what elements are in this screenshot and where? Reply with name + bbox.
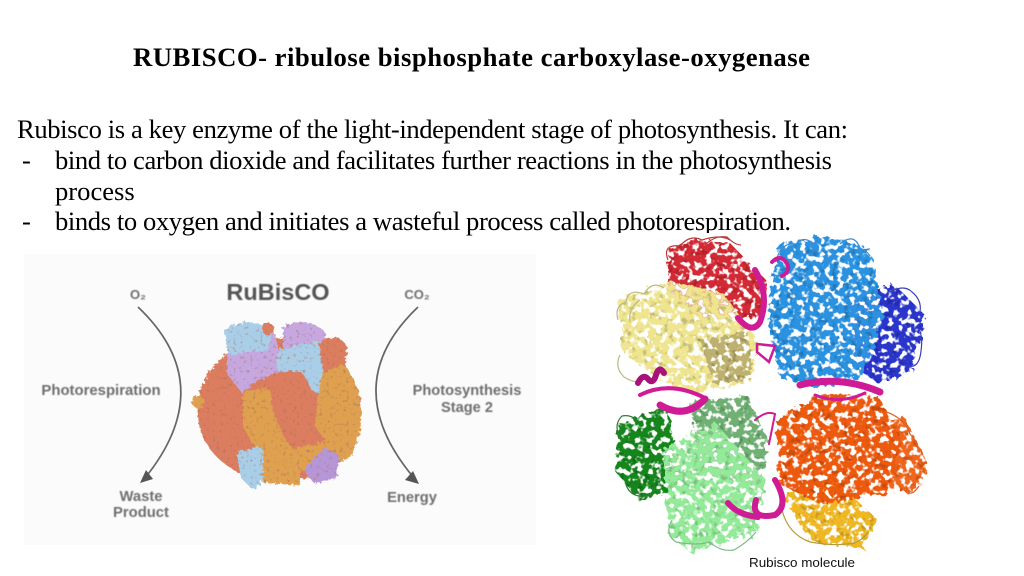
protein ribbon: light blue subunit (768, 236, 884, 388)
icon: RuBisCO protein globule (192, 323, 361, 484)
label: waste product: Waste (119, 489, 163, 505)
protein ribbon: magenta links (638, 258, 880, 517)
panel: Rubisco molecule structure (610, 233, 928, 570)
protein ribbon: yellow tan inner (700, 332, 752, 386)
caption: Rubisco molecule: Rubisco molecule (749, 556, 855, 570)
panel: RuBisCO diagram (24, 254, 536, 545)
diagram heading: RuBisCO (226, 279, 330, 305)
protein ribbon: dark green subunit (616, 405, 680, 502)
label: CO2: CO₂ (404, 287, 430, 302)
arrow: oxygen to waste (138, 307, 181, 483)
bullet: carbon dioxide (22, 145, 832, 206)
label: photorespiration: Photorespiration (41, 383, 161, 399)
bullet: carbon dioxide: process (55, 176, 135, 206)
bullet: carbon dioxide: bind to carbon dioxide and facilitates further reactions in the photosynthesis (55, 145, 832, 175)
label: waste product: Product (113, 505, 169, 521)
bullet: carbon dioxide: - (22, 145, 31, 175)
protein ribbon: orange right subunit (880, 410, 928, 493)
label: waste product (113, 489, 169, 521)
label: O2: O₂ (130, 287, 146, 302)
label: energy: Energy (387, 490, 438, 506)
protein ribbon: mid green subunit (690, 396, 768, 485)
protein ribbon: dark blue subunit (850, 285, 925, 384)
protein ribbon: orange subunit (776, 394, 902, 504)
label: photosynthesis stage 2: Photosynthesis (413, 383, 521, 399)
intro sentence: Rubisco is a key enzyme of the light-independent stage of photosynthesis. It can: (17, 114, 848, 144)
bullet: oxygen: binds to oxygen and initiates a wasteful process called photorespiration. (55, 206, 791, 236)
protein ribbon: golden subunit (782, 476, 878, 548)
protein ribbon: red subunit (666, 237, 766, 318)
label: photosynthesis stage 2: Stage 2 (441, 400, 493, 416)
body text (17, 114, 848, 236)
arrow: carbon dioxide to energy (376, 307, 419, 484)
title: RUBISCO- ribulose bisphosphate carboxylase-oxygenase (133, 42, 810, 72)
protein ribbon: yellow subunit (617, 282, 758, 394)
label: photosynthesis stage 2 (413, 383, 521, 416)
protein ribbon: light green subunit (664, 422, 766, 552)
bullet: oxygen: - (22, 206, 31, 236)
